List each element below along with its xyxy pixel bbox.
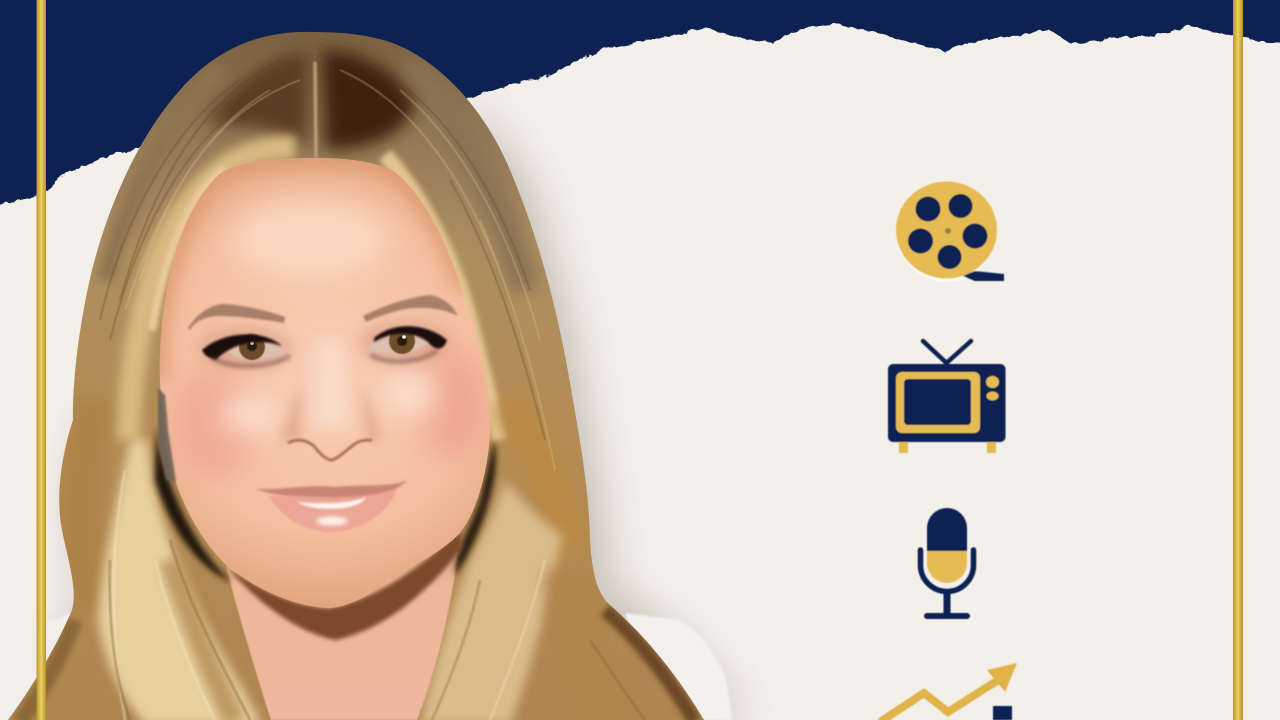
cheek highlights — [222, 375, 436, 433]
tan strand left — [170, 560, 235, 720]
right eye — [367, 326, 447, 361]
eye socket tint — [199, 322, 451, 368]
chin shadow — [226, 530, 462, 640]
hairline shadow — [160, 158, 462, 380]
gold band left — [81, 400, 95, 610]
left cheek blush — [172, 370, 252, 480]
pale blond panel left — [98, 440, 262, 720]
grey-brown hair left — [105, 70, 220, 280]
right eyebrow — [363, 295, 458, 322]
neck and chest — [226, 530, 460, 720]
hair base — [0, 20, 760, 720]
dark crown right — [322, 50, 415, 150]
blond frame right — [385, 155, 500, 440]
icon: growth chart arrow — [880, 663, 1017, 720]
forehead highlight — [230, 200, 390, 280]
blond frame left — [128, 148, 295, 440]
dark lower left — [20, 620, 75, 720]
fine hair strands — [100, 60, 645, 720]
torn navy banner — [0, 0, 1280, 208]
portrait shadow — [40, 100, 745, 720]
nose — [280, 340, 382, 460]
dark crown left — [205, 50, 308, 148]
icon: television — [888, 341, 1006, 453]
face — [160, 158, 490, 608]
hair — [0, 20, 760, 720]
dark hair shadow right of jaw — [455, 440, 496, 575]
hair parting — [315, 62, 316, 158]
grey-brown hair right — [405, 70, 525, 290]
blond panel right — [420, 480, 562, 720]
left eyebrow — [188, 304, 285, 330]
mouth — [256, 480, 408, 532]
face shading — [160, 158, 489, 480]
right cheek blush — [421, 350, 489, 460]
dark hair shadow left of jaw — [155, 425, 232, 582]
icon: film reel — [896, 182, 1004, 282]
white top — [0, 610, 732, 720]
earring — [158, 388, 176, 482]
pale inner frame left — [152, 168, 225, 330]
icon: microphone — [920, 508, 974, 619]
gold band right — [510, 400, 572, 555]
gold lower right — [538, 564, 602, 615]
portrait of a woman — [0, 20, 760, 720]
left eye — [202, 334, 290, 366]
dark brown lower right — [605, 610, 695, 720]
